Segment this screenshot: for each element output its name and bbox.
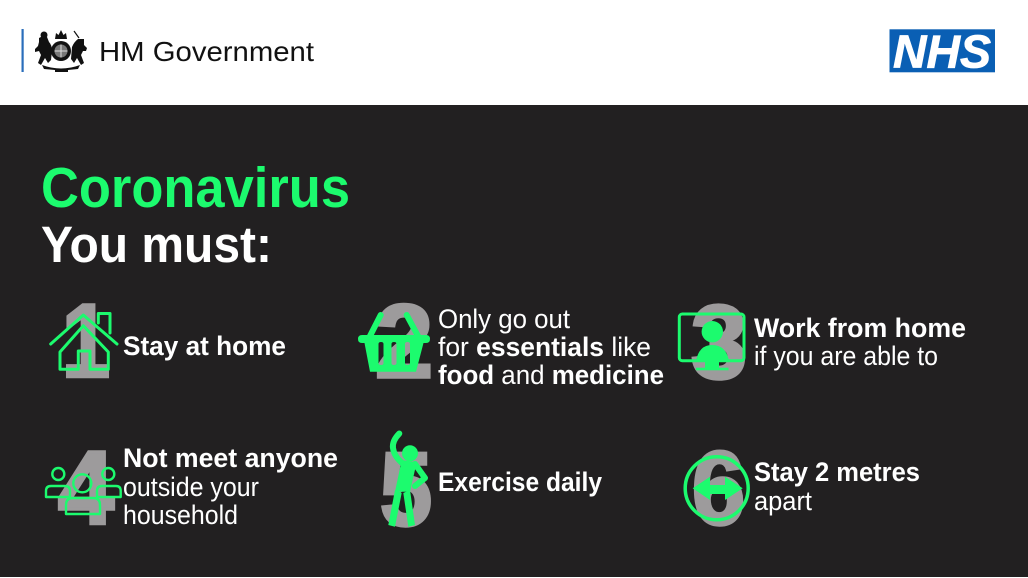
item 6: stay 2 metres apart <box>685 431 920 547</box>
item 2: essentials: for essentials like <box>438 332 651 362</box>
item 4: not meet anyone: outside your <box>123 472 259 502</box>
item 1: stay at home <box>51 284 286 400</box>
icon: house <box>51 314 117 369</box>
text: Stay 2 metres <box>754 457 920 487</box>
title: You must: <box>41 216 272 273</box>
item 2: essentials <box>358 284 664 400</box>
text: Stay at home <box>123 331 286 361</box>
number 1: 1 <box>62 284 110 400</box>
number 2: 2 <box>375 284 433 400</box>
icon: basket <box>358 315 430 372</box>
number 4: 4 <box>58 430 114 546</box>
item 3: work from home: if you are able to <box>754 341 938 371</box>
item 4: not meet anyone: household <box>123 500 238 530</box>
icon: video call <box>679 314 744 370</box>
item 6: stay 2 metres apart: apart <box>754 486 812 516</box>
icon: distance arrow in circle <box>685 457 748 520</box>
title <box>41 156 350 273</box>
text: Not meet anyone <box>123 443 338 473</box>
item 4: not meet anyone <box>46 430 338 546</box>
icon: royal crest <box>35 30 87 72</box>
HM Government logo <box>22 29 314 72</box>
number 3: 3 <box>691 285 747 401</box>
NHS logo: NHS <box>893 26 991 78</box>
icon: person stretching <box>388 434 425 527</box>
number 5: 5 <box>380 432 432 548</box>
item 3: work from home <box>679 285 966 401</box>
text: Only go out <box>438 304 570 334</box>
item 5: exercise daily <box>380 432 602 548</box>
number 6: 6 <box>692 431 745 547</box>
text: Exercise daily <box>438 467 602 497</box>
header band <box>0 0 1028 105</box>
brand name: HM Government <box>99 36 314 67</box>
icon: group of people <box>46 468 121 514</box>
title: Coronavirus <box>41 156 350 220</box>
text: Work from home <box>754 313 966 343</box>
item 2: essentials: food and medicine <box>438 360 664 390</box>
